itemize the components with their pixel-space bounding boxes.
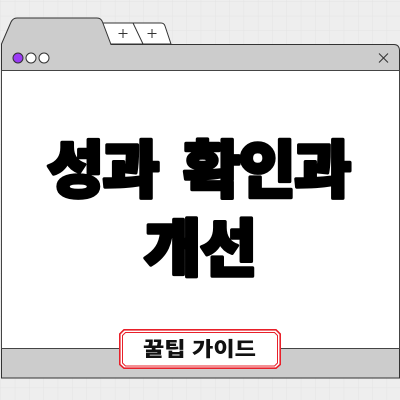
badge label: 꿀팁 가이드 [143,338,256,361]
back tabs [100,23,171,44]
icon: close [379,54,388,62]
title: 개선 [144,216,256,284]
title [47,137,350,284]
content area [2,70,400,348]
title: 성과 [47,137,158,206]
badge [120,330,280,368]
icon: white dot [39,53,49,63]
icon: purple dot [13,53,23,63]
title: 확인과 [183,137,350,206]
icon: plus [118,29,128,38]
icon: white dot [26,53,36,63]
icon: plus [148,29,156,38]
